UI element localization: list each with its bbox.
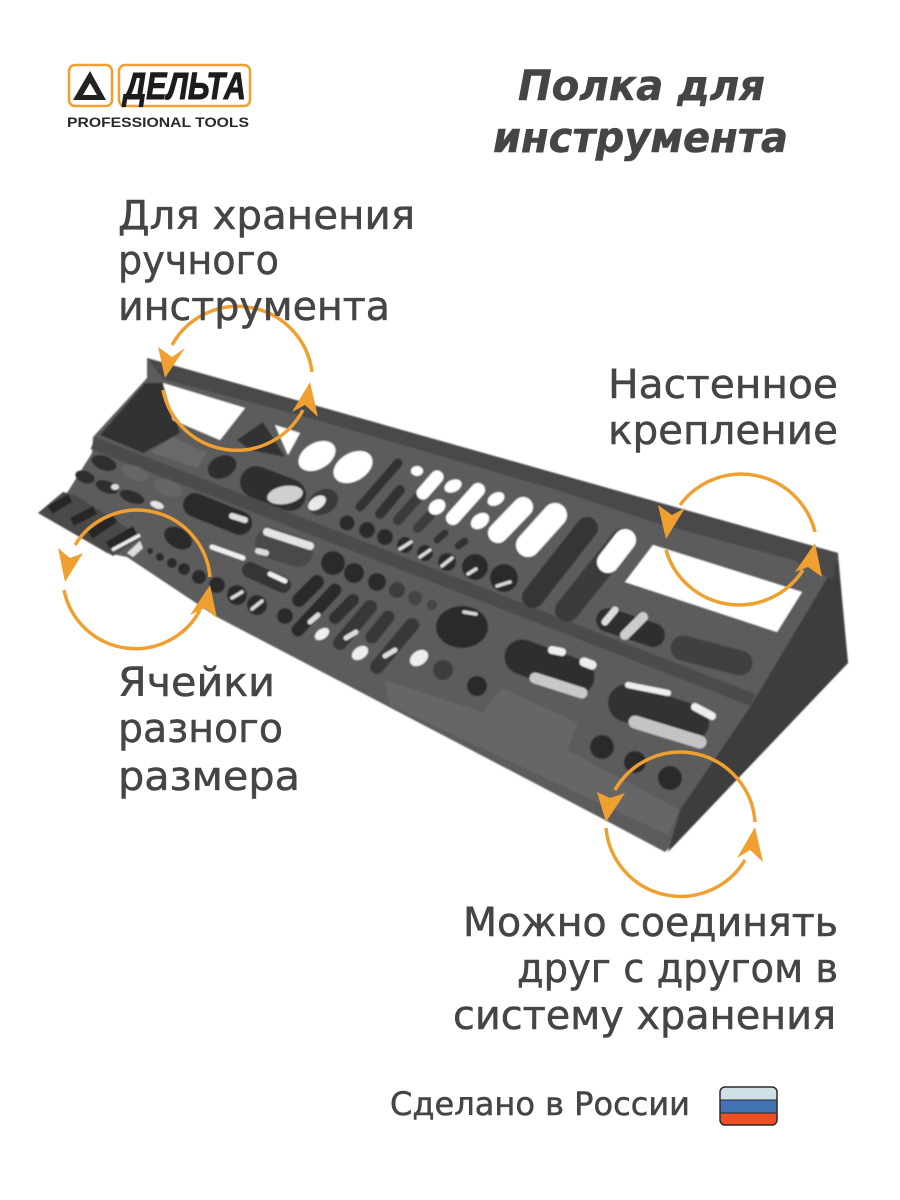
text: connectable system: Можно соединять <box>463 900 838 946</box>
text: cell sizes: разного <box>118 706 283 752</box>
text: made in Russia: Сделано в России <box>390 1085 690 1123</box>
callout arrow: cells <box>58 510 217 649</box>
logo: ДЕЛЬТА <box>122 66 246 108</box>
title: Полка для <box>518 61 765 110</box>
title <box>493 61 788 162</box>
white slits in holes <box>232 542 510 614</box>
callout arrow: wall mount <box>658 474 822 605</box>
centre rib <box>93 443 753 700</box>
text: connectable system: друг с другом в <box>517 946 838 992</box>
text: hand tool storage <box>118 193 415 330</box>
text: wall mount: Настенное <box>608 362 838 408</box>
rear box <box>100 383 245 468</box>
slanted slots <box>360 463 625 610</box>
icon: Russian flag <box>720 1087 777 1125</box>
round holes <box>147 516 682 790</box>
logo <box>67 65 250 130</box>
lower recess <box>385 680 680 835</box>
text: cell sizes: Ячейки <box>118 660 275 706</box>
shelf body <box>38 358 848 852</box>
text: hand tool storage: ручного <box>118 238 279 284</box>
text: cell sizes: размера <box>118 754 300 800</box>
lower left slots <box>195 505 412 667</box>
text: connectable system: систему хранения <box>453 993 836 1039</box>
text: cell sizes <box>118 660 300 800</box>
text: wall mount <box>608 362 838 454</box>
callout arrow: connect <box>597 752 763 896</box>
upper cells <box>204 422 378 520</box>
shelf right side <box>668 560 848 852</box>
callout arrow: hand tools <box>158 306 318 450</box>
text: connectable system <box>453 900 838 1039</box>
right cells <box>522 610 740 742</box>
shelf product photo <box>38 358 848 852</box>
clipped tools <box>38 492 143 557</box>
top rail <box>147 358 838 580</box>
title: инструмента <box>493 113 788 162</box>
left cells <box>74 452 185 511</box>
logo: PROFESSIONAL TOOLS <box>67 114 249 130</box>
text: hand tool storage: Для хранения <box>118 193 415 239</box>
wall mount window <box>625 545 802 632</box>
text: hand tool storage: инструмента <box>118 284 390 330</box>
text: wall mount: крепление <box>608 408 838 454</box>
